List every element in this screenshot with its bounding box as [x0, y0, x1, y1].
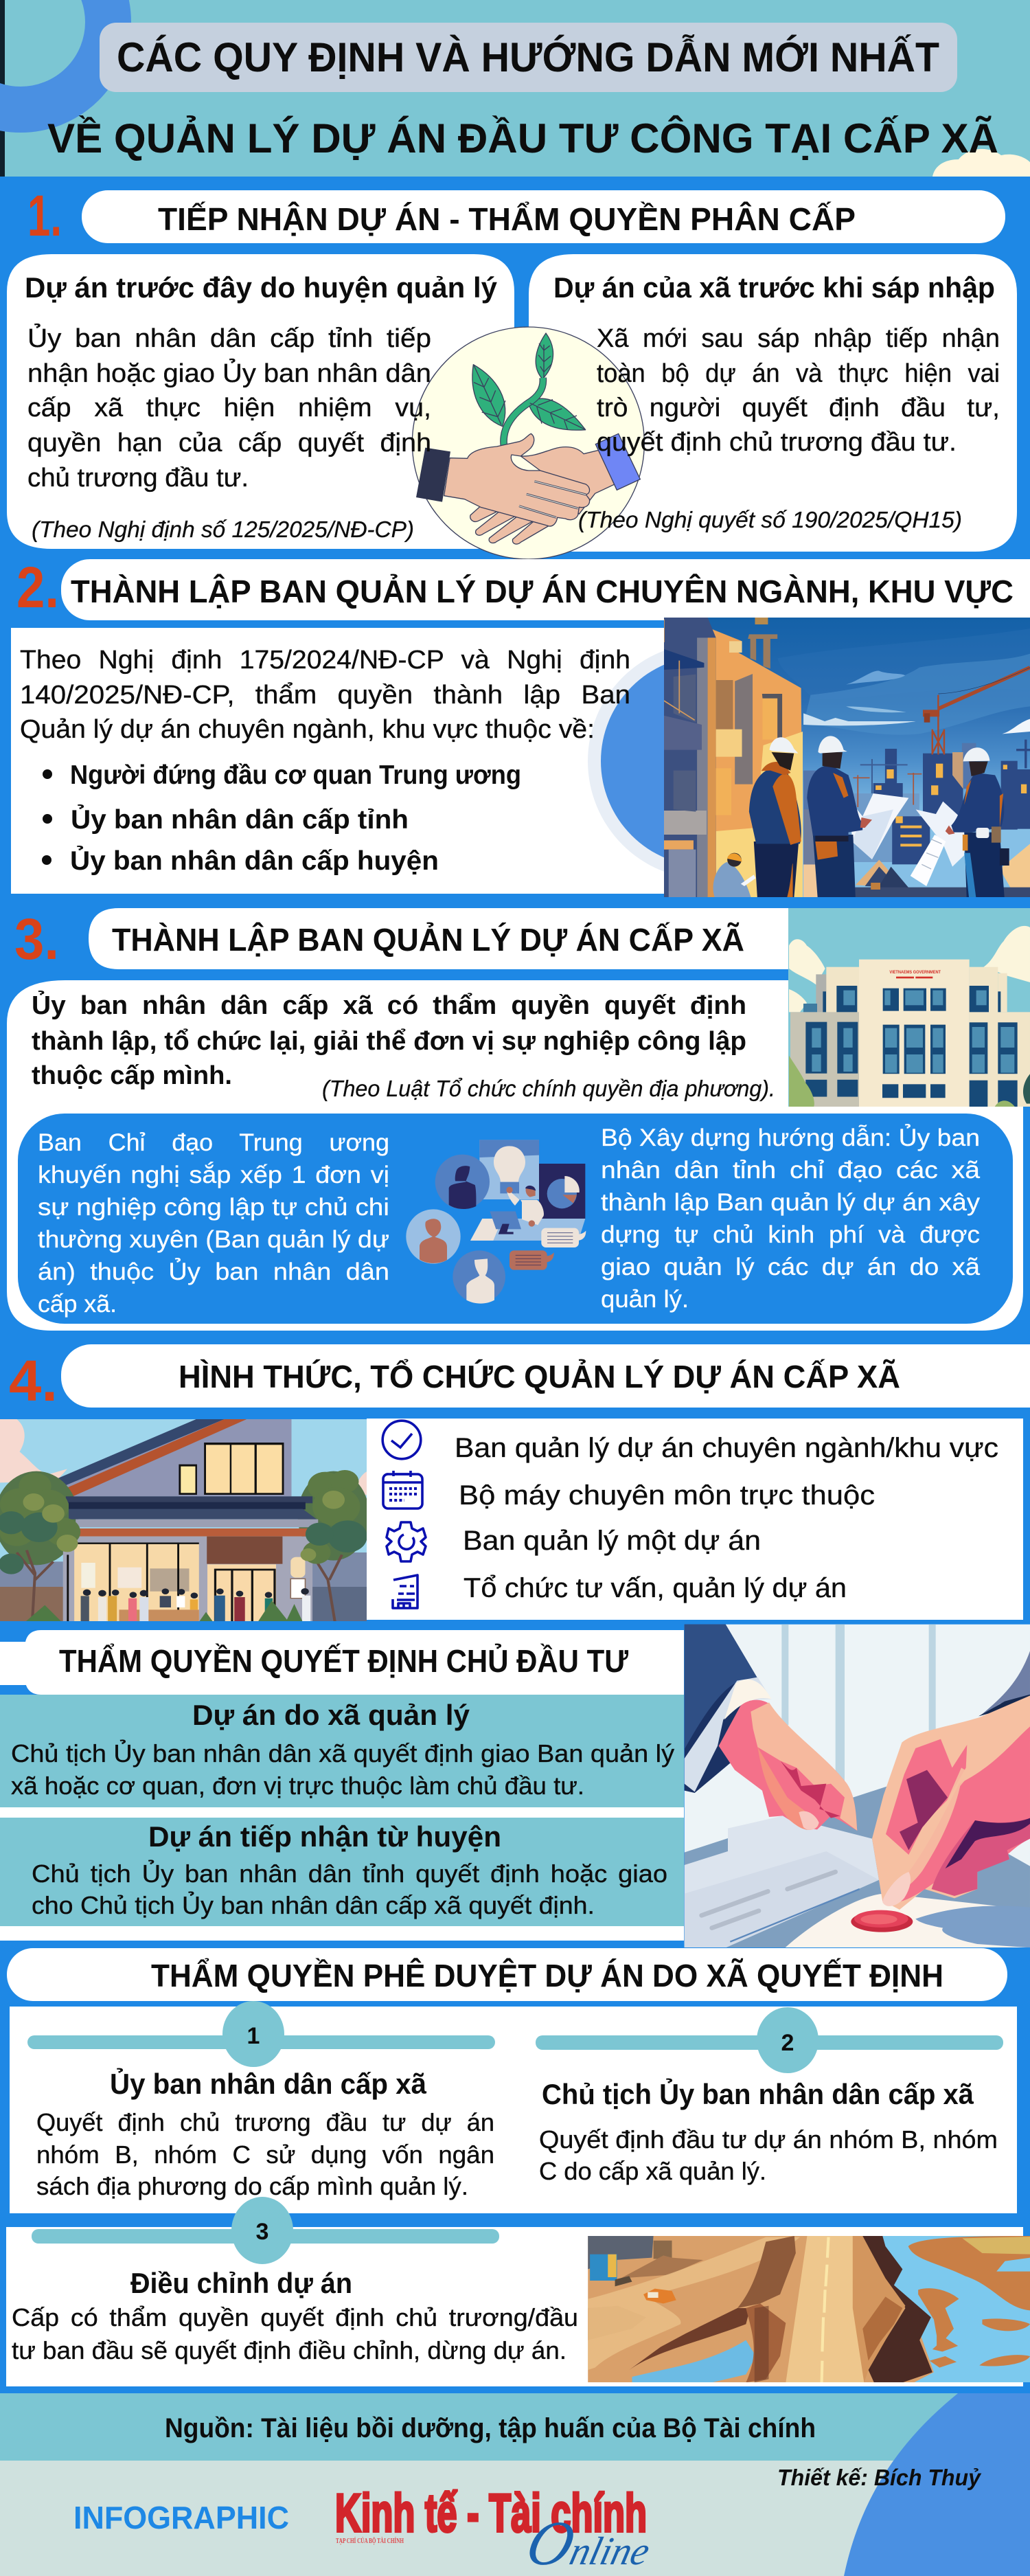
illustration: hands sealing document [685, 1625, 1030, 1947]
footer background [0, 2461, 1030, 2576]
decision authority heading: THẨM QUYỀN QUYẾT ĐỊNH CHỦ ĐẦU TƯ [59, 1643, 629, 1679]
panel: right card background [529, 254, 1017, 552]
panel: commune-managed projects: xã hoặc cơ quan, đơn vị trực thuộc làm chủ đầu tư. [11, 1772, 584, 1800]
guidance right text: nhân dân tỉnh chỉ đạo các xã [601, 1157, 981, 1184]
step 2 marker: 2 [781, 2030, 794, 2056]
guidance left text: khuyến nghị sắp xếp 1 đơn vị [38, 1162, 389, 1188]
illustration: construction engineers [664, 618, 1030, 898]
right card heading: Dự án của xã trước khi sáp nhập [553, 271, 995, 304]
bullet list: Ủy ban nhân dân cấp huyện [70, 846, 439, 876]
icon: document building [393, 1575, 417, 1608]
guidance left text: sự nghiệp công lập tự chủ chi [38, 1194, 389, 1221]
forms list: Bộ máy chuyên môn trực thuộc [459, 1480, 875, 1511]
step 2 text: C do cấp xã quản lý. [539, 2157, 766, 2185]
step 2 marker [536, 2007, 1003, 2073]
section 4 heading [61, 1344, 1030, 1408]
right card body [597, 324, 1000, 457]
guidance right text [601, 1124, 981, 1313]
illustration: government building [786, 907, 1030, 1109]
step 3 text [12, 2267, 578, 2364]
panel: left card background [7, 254, 514, 549]
illustration: team collaboration [406, 1140, 586, 1304]
right citation: (Theo Nghị quyết số 190/2025/QH15) [578, 507, 962, 532]
step 1 text: Quyết định chủ trương đầu tư dự án [36, 2108, 494, 2136]
step 3 text: Cấp có thẩm quyền quyết định chủ trương/đầu [12, 2303, 578, 2331]
guidance left text: án) thuộc Ủy ban nhân dân [38, 1258, 389, 1285]
number 1: 1. [27, 183, 62, 248]
left card body: nhận hoặc giao Ủy ban nhân dân [27, 358, 431, 388]
left card body: quyền hạn của cấp quyết định [27, 429, 431, 457]
right card body: Xã mới sau sáp nhập tiếp nhận [597, 324, 1000, 353]
icon: check circle [382, 1421, 421, 1459]
bullet list: Người đứng đầu cơ quan Trung ương [70, 760, 521, 790]
guidance left text [38, 1129, 389, 1318]
section 2 intro text: Theo Nghị định 175/2024/NĐ-CP và Nghị định [20, 646, 630, 675]
forms list: Tổ chức tư vấn, quản lý dự án [464, 1573, 847, 1603]
forms list [455, 1433, 998, 1603]
bullet list [42, 760, 521, 876]
step 1 text: Ủy ban nhân dân cấp xã [110, 2067, 427, 2100]
step 1 marker [27, 2001, 495, 2067]
title line 2: VỀ QUẢN LÝ DỰ ÁN ĐẦU TƯ CÔNG TẠI CẤP XÃ [47, 115, 998, 161]
panel: commune-managed projects: Chủ tịch Ủy ban nhân dân xã quyết định giao Ban quản lý [11, 1739, 674, 1767]
panel: projects received from district: Dự án tiếp nhận từ huyện [148, 1820, 501, 1853]
left card body: chủ trương đầu tư. [27, 464, 249, 493]
panel: forms list background [367, 1419, 1023, 1620]
panel: section 2 text card [11, 628, 664, 894]
approvals heading [7, 1948, 1007, 2001]
guidance right text: Bộ Xây dựng hướng dẫn: Ủy ban [601, 1124, 980, 1151]
citation: (Theo Luật Tổ chức chính quyền địa phương). [322, 1076, 775, 1101]
step 2 text: Quyết định đầu tư dự án nhóm B, nhóm [539, 2125, 998, 2154]
infographic label: INFOGRAPHIC [73, 2500, 289, 2535]
step 1 text: sách địa phương do cấp mình quản lý. [36, 2172, 468, 2200]
section 2 intro text [20, 646, 630, 744]
section 4 [0, 1344, 1030, 1947]
forms list: Ban quản lý dự án chuyên ngành/khu vực [455, 1433, 998, 1463]
right card body: trò người quyết định đầu tư, [597, 394, 1000, 422]
source line: Nguồn: Tài liệu bồi dưỡng, tập huấn của Bộ Tài chính [165, 2413, 816, 2443]
panel: projects received from district [0, 1818, 684, 1926]
forms list: Ban quản lý một dự án [463, 1526, 761, 1556]
illustration: government building: VIETNAEMS GOVERNMENT [889, 970, 941, 975]
section approvals [6, 1948, 1030, 2386]
panel: blue guidance card [18, 1114, 1013, 1324]
illustration: handshake and plant [412, 327, 644, 559]
publication logo: TẠP CHÍ CỦA BỘ TÀI CHÍNH [336, 2536, 404, 2545]
decision authority heading [0, 1630, 684, 1695]
panel: adjustment card [6, 2227, 1023, 2386]
section 3 heading: THÀNH LẬP BAN QUẢN LÝ DỰ ÁN CẤP XÃ [112, 922, 744, 958]
icon: calendar [383, 1471, 422, 1509]
title pill: CÁC QUY ĐỊNH VÀ HƯỚNG DẪN MỚI NHẤT [117, 34, 939, 80]
panel: approvals card [10, 2007, 1017, 2213]
step 2 text: Chủ tịch Ủy ban nhân dân cấp xã [542, 2077, 974, 2110]
guidance right text: thành lập Ban quản lý dự án xây [601, 1189, 981, 1216]
left citation: (Theo Nghị định số 125/2025/NĐ-CP) [32, 517, 414, 542]
guidance right text: quản lý. [601, 1286, 689, 1313]
publication logo [335, 2483, 659, 2576]
left card body: cấp xã thực hiện nhiệm vụ, [27, 394, 431, 422]
section 2 [11, 555, 1030, 898]
step 2 text [539, 2077, 998, 2185]
guidance right text: dựng tự chủ kinh phí và được [601, 1221, 980, 1248]
step 1 text: nhóm B, nhóm C sử dụng vốn ngân [36, 2140, 494, 2169]
right card body: toàn bộ dự án và thực hiện vai [597, 359, 1000, 388]
guidance left text: Ban Chỉ đạo Trung ương [38, 1129, 389, 1156]
section 2 intro text: Quản lý dự án chuyên ngành, khu vực thuộc về: [20, 715, 595, 744]
section 1 heading [82, 190, 1005, 243]
right card body: quyết định chủ trương đầu tư. [597, 428, 957, 457]
approvals heading: THẨM QUYỀN PHÊ DUYỆT DỰ ÁN DO XÃ QUYẾT ĐỊNH [151, 1958, 943, 1993]
panel: projects received from district: cho Chủ tịch Ủy ban nhân dân cấp xã quyết định. [32, 1890, 595, 1919]
section 3 main statement: Ủy ban nhân dân cấp xã có thẩm quyền quyết định [32, 990, 746, 1020]
publication logo: Kinh tế - Tài chính [335, 2483, 647, 2543]
illustration: eroded road [588, 2236, 1030, 2382]
designer credit: Thiết kế: Bích Thuỷ [777, 2465, 982, 2490]
header band [0, 0, 1030, 177]
panel: decision white backing [0, 1695, 684, 1941]
number 3: 3. [14, 907, 59, 971]
step 3 text: Điều chỉnh dự án [130, 2267, 352, 2299]
title pill [100, 23, 957, 92]
step 3 text: tư ban đầu sẽ quyết định điều chỉnh, dừng dự án. [12, 2336, 566, 2364]
illustration: commune office [0, 1419, 369, 1622]
section 3 [7, 907, 1030, 1331]
section 3 main statement: thuộc cấp mình. [32, 1061, 232, 1090]
section 4 heading: HÌNH THỨC, TỔ CHỨC QUẢN LÝ DỰ ÁN CẤP XÃ [179, 1359, 900, 1394]
section 2 intro text: 140/2025/NĐ-CP, thẩm quyền thành lập Ban [20, 681, 630, 710]
guidance left text: cấp xã. [38, 1291, 117, 1318]
bullet list: Ủy ban nhân dân cấp tỉnh [71, 804, 409, 835]
source band [0, 2393, 1030, 2461]
number 4: 4. [9, 1348, 58, 1413]
step 3 marker: 3 [256, 2219, 268, 2245]
section 2 heading [61, 559, 1030, 620]
left card heading: Dự án trước đây do huyện quản lý [25, 271, 498, 304]
panel: section 3 card [7, 980, 1023, 1331]
section 2 heading: THÀNH LẬP BAN QUẢN LÝ DỰ ÁN CHUYÊN NGÀNH, KHU VỰC [71, 574, 1014, 609]
icon: gear [387, 1522, 426, 1561]
section 3 main statement [32, 990, 746, 1090]
decorative blue corner [844, 2393, 1030, 2576]
left card body [27, 323, 431, 493]
footer [0, 2393, 1030, 2576]
step 3 marker [32, 2197, 499, 2264]
number 2: 2. [16, 555, 59, 620]
panel: commune-managed projects: Dự án do xã quản lý [192, 1699, 470, 1731]
section 1 heading: TIẾP NHẬN DỰ ÁN - THẨM QUYỀN PHÂN CẤP [158, 201, 856, 237]
step 1 marker: 1 [247, 2023, 260, 2049]
left card body: Ủy ban nhân dân cấp tỉnh tiếp [27, 323, 431, 353]
guidance right text: giao quản lý các dự án do xã [601, 1254, 981, 1280]
panel: commune-managed projects [0, 1695, 684, 1807]
guidance left text: thường xuyên (Ban quản lý dự [38, 1226, 389, 1253]
step 1 text [36, 2067, 494, 2200]
section 1 [7, 183, 1017, 559]
panel: projects received from district: Chủ tịch Ủy ban nhân dân tỉnh quyết định hoặc giao [32, 1859, 667, 1888]
section 3 main statement: thành lập, tổ chức lại, giải thể đơn vị sự nghiệp công lập [32, 1027, 746, 1056]
section 3 heading [89, 908, 788, 969]
decorative disc [588, 643, 824, 879]
